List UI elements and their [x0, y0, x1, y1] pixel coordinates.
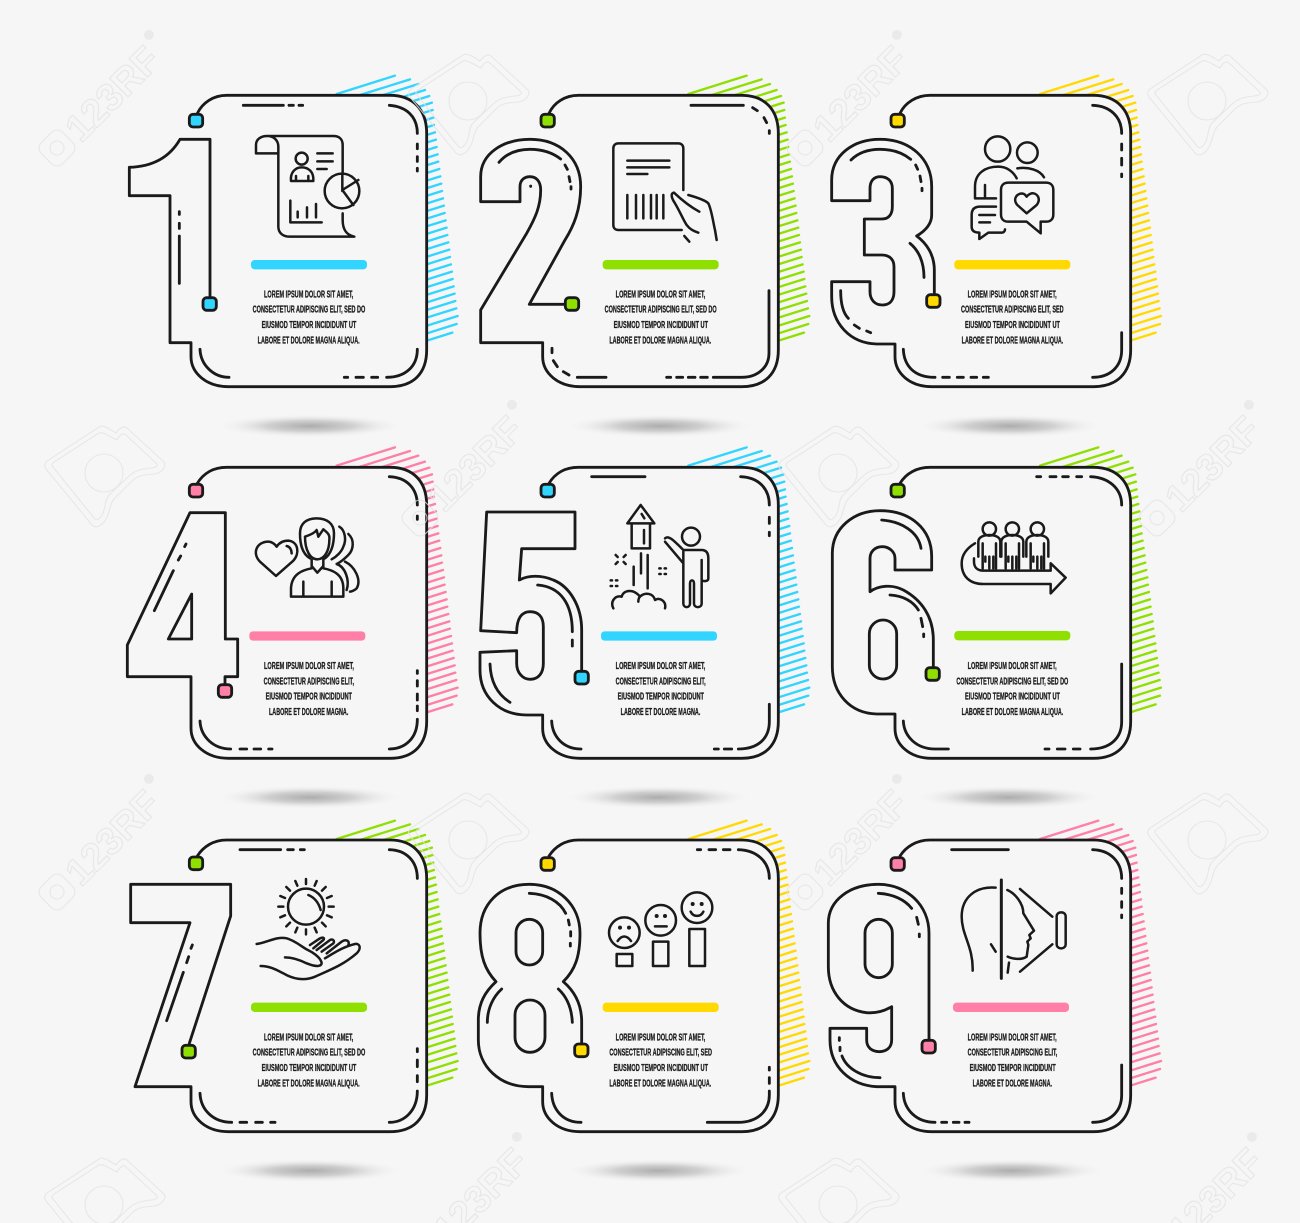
panel 5: firework rocket: [480, 447, 809, 809]
shadow: [215, 1159, 405, 1183]
accent dashes: [487, 850, 769, 1122]
text block: LOREM IPSUM DOLOR SIT AMET,: [264, 289, 354, 300]
node bottom: [203, 298, 216, 310]
shadow: [915, 414, 1105, 438]
progress bar: [251, 1003, 367, 1012]
node bottom: [575, 671, 588, 684]
text block: CONSECTETUR ADIPISCING ELIT, SED DO: [253, 305, 366, 316]
icon: face scan: [962, 880, 1066, 978]
text block: LABORE ET DOLORE MAGNA.: [621, 707, 701, 718]
accent dashes: [841, 105, 1122, 377]
node top: [891, 114, 904, 127]
card and digit 9 outline: [828, 840, 1131, 1132]
card and digit 5 outline: [480, 467, 778, 758]
text block: LABORE ET DOLORE MAGNA ALIQUA.: [258, 335, 360, 346]
text block: LOREM IPSUM DOLOR SIT AMET,: [968, 661, 1057, 672]
text block: LOREM IPSUM DOLOR SIT AMET,: [264, 1032, 354, 1043]
text block: EIUSMOD TEMPOR INCIDIDUNT: [266, 692, 352, 703]
panel 6: queue: [832, 447, 1161, 809]
accent dashes: [167, 850, 417, 1122]
text block: LABORE ET DOLORE MAGNA ALIQUA.: [962, 335, 1064, 346]
text block: LABORE ET DOLORE MAGNA ALIQUA.: [609, 335, 712, 346]
watermark logos: 123RF: [806, 783, 917, 894]
text block: LABORE ET DOLORE MAGNA.: [973, 1078, 1052, 1089]
icon: report document: [256, 136, 359, 237]
text block: CONSECTETUR ADIPISCING ELIT,: [968, 1048, 1058, 1059]
text block: CONSECTETUR ADIPISCING ELIT, SED DO: [956, 676, 1069, 687]
shadow: [913, 785, 1103, 809]
text block: LABORE ET DOLORE MAGNA ALIQUA.: [609, 1078, 712, 1089]
text block: LABORE ET DOLORE MAGNA ALIQUA.: [258, 1078, 360, 1089]
text block: EIUSMOD TEMPOR INCIDIDUNT UT: [965, 320, 1060, 331]
progress bar: [249, 631, 365, 641]
node top: [189, 857, 203, 870]
node top: [189, 484, 203, 497]
progress bar: [603, 1003, 719, 1012]
text block: CONSECTETUR ADIPISCING ELIT, SED: [609, 1048, 712, 1059]
shadow: [563, 1159, 753, 1183]
node top: [541, 484, 554, 497]
accent dashes: [882, 477, 1122, 749]
watermark logos: 123RF: [58, 783, 169, 894]
stripes: [337, 447, 458, 723]
stripes: [688, 76, 809, 351]
accent dashes: [179, 105, 417, 377]
stripes: [1040, 821, 1161, 1096]
progress bar: [954, 260, 1070, 269]
watermark logos: 123RF: [421, 409, 532, 520]
panel 8: mood ratings: [478, 821, 809, 1183]
shadow: [215, 414, 405, 438]
panel 3: love chat: [832, 76, 1161, 438]
node bottom: [218, 685, 232, 697]
stripes: [688, 821, 809, 1096]
panel 7: sun in hand: [131, 821, 458, 1183]
accent dashes: [154, 477, 417, 749]
text block: EIUSMOD TEMPOR INCIDIDUNT UT: [965, 692, 1060, 703]
node top: [891, 858, 904, 870]
stripes: [337, 76, 458, 351]
stripes: [337, 821, 458, 1096]
node top: [541, 858, 554, 870]
stripes: [688, 447, 809, 723]
node top: [189, 114, 203, 127]
icon: barcode in hand: [613, 143, 717, 242]
text block: CONSECTETUR ADIPISCING ELIT,: [616, 676, 706, 687]
node top: [541, 114, 554, 127]
panel 4: heart and man: [127, 447, 458, 809]
panel 1: report: [129, 76, 458, 438]
text block: LOREM IPSUM DOLOR SIT AMET,: [968, 1032, 1057, 1043]
progress bar: [603, 260, 719, 269]
node bottom: [926, 668, 939, 680]
card and digit 2 outline: [481, 95, 778, 387]
stripes: [1040, 447, 1161, 723]
text block: LOREM IPSUM DOLOR SIT AMET,: [264, 661, 354, 672]
icon: sun over hand: [257, 879, 360, 979]
card and digit 3 outline: [832, 95, 1131, 387]
text block: EIUSMOD TEMPOR INCIDIDUNT UT: [614, 1063, 708, 1074]
shadow: [565, 414, 755, 438]
shadow: [917, 1159, 1107, 1183]
node bottom: [575, 1044, 588, 1057]
watermark logos: 123RF: [806, 39, 917, 150]
text block: EIUSMOD TEMPOR INCIDIDUNT UT: [262, 1063, 356, 1074]
icon: couple and heart chat: [972, 136, 1053, 239]
card and digit 7 outline: [131, 840, 427, 1132]
node bottom: [565, 298, 579, 310]
accent dashes: [839, 850, 1122, 1122]
shadow: [563, 785, 753, 809]
icon: people queue with arrow: [962, 522, 1066, 593]
icon: smiley ratings: [609, 892, 712, 966]
text block: EIUSMOD TEMPOR INCIDIDUNT UT: [614, 320, 708, 331]
text block: CONSECTETUR ADIPISCING ELIT, SED DO: [605, 305, 717, 316]
stripes: [1040, 76, 1161, 351]
text block: CONSECTETUR ADIPISCING ELIT,: [264, 676, 354, 687]
card and digit 8 outline: [478, 840, 778, 1132]
card and digit 1 outline: [129, 95, 427, 387]
card and digit 6 outline: [832, 467, 1131, 758]
accent dashes: [490, 477, 769, 749]
progress bar: [954, 631, 1070, 640]
node top: [891, 484, 904, 497]
text block: CONSECTETUR ADIPISCING ELIT, SED: [961, 305, 1064, 316]
watermark logos: 123RF: [58, 39, 169, 150]
text block: LOREM IPSUM DOLOR SIT AMET,: [616, 661, 706, 672]
shadow: [215, 785, 405, 809]
text block: EIUSMOD TEMPOR INCIDIDUNT: [970, 1063, 1056, 1074]
node bottom: [182, 1045, 195, 1058]
text block: LABORE ET DOLORE MAGNA ALIQUA.: [962, 707, 1064, 718]
text block: LABORE ET DOLORE MAGNA.: [269, 707, 349, 718]
card and digit 4 outline: [127, 467, 427, 758]
node bottom: [927, 295, 940, 307]
icon: rocket and person: [611, 505, 708, 608]
progress bar: [601, 631, 717, 641]
text block: LOREM IPSUM DOLOR SIT AMET,: [968, 289, 1057, 300]
watermark logos: 123RF: [1158, 409, 1269, 520]
progress bar: [251, 260, 367, 269]
text block: CONSECTETUR ADIPISCING ELIT, SED DO: [253, 1048, 366, 1059]
text block: LOREM IPSUM DOLOR SIT AMET,: [616, 289, 706, 300]
accent dashes: [499, 105, 769, 377]
panel 9: face scan: [828, 821, 1161, 1183]
text block: LOREM IPSUM DOLOR SIT AMET,: [616, 1032, 706, 1043]
text block: EIUSMOD TEMPOR INCIDIDUNT UT: [262, 320, 356, 331]
icon: heart and man: [256, 518, 358, 597]
node bottom: [922, 1040, 935, 1053]
panel 2: barcode: [481, 76, 809, 438]
progress bar: [953, 1003, 1069, 1012]
text block: EIUSMOD TEMPOR INCIDIDUNT: [618, 692, 704, 703]
